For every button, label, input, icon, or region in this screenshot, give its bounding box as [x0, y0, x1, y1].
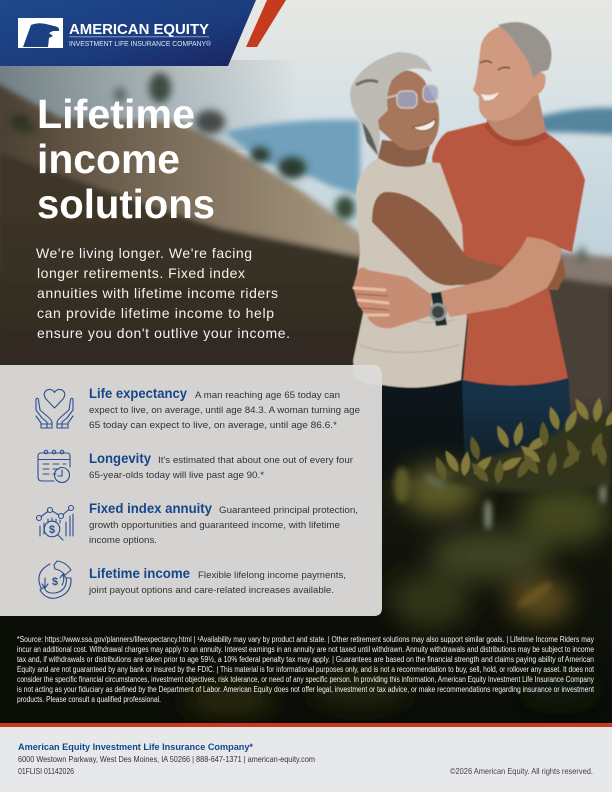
text block: life expectancy: 65 today can expect to live, on average, until age 86.6.*	[89, 420, 337, 431]
panel: key facts	[0, 365, 382, 616]
woman's arm	[372, 192, 507, 286]
woman's face	[374, 70, 439, 151]
intro text	[36, 245, 290, 341]
title: Lifetime	[37, 91, 195, 137]
intro text: longer retirements. Fixed index	[37, 265, 245, 281]
text block: longevity: Longevity	[89, 450, 151, 466]
woman's dark trousers	[352, 375, 470, 480]
text block: longevity: It's estimated that about one out of every four	[158, 455, 354, 466]
text block: lifetime income: Flexible lifelong income payments,	[198, 570, 346, 581]
photo: couple embracing	[350, 22, 585, 480]
title: solutions	[37, 181, 215, 227]
intro text: annuities with lifetime income riders	[37, 285, 278, 301]
text block: life expectancy: expect to live, on average, until age 84.3. A woman turning age	[89, 405, 360, 416]
icon: circular income arrows	[39, 561, 71, 598]
title	[37, 91, 215, 227]
woman's shirt	[353, 158, 467, 388]
footer: American Equity Investment Life Insurance Company*	[18, 742, 253, 753]
icon: heart in hands	[36, 389, 73, 428]
accent stripe	[246, 0, 286, 47]
woman's hand	[543, 258, 565, 290]
footer: ©2026 American Equity. All rights reserved.	[450, 766, 593, 776]
wristwatch	[429, 292, 447, 326]
clasped hands	[353, 268, 432, 328]
eagle mark	[18, 18, 63, 48]
text block: life expectancy: A man reaching age 65 today can	[195, 390, 340, 401]
icon: growth chart and magnifier	[36, 506, 74, 540]
text block: fixed index annuity: Guaranteed principal protection,	[219, 505, 358, 516]
woman's glasses	[386, 95, 398, 98]
text block: fixed index annuity: Fixed index annuity	[89, 500, 212, 516]
text block: longevity: 65-year-olds today will live past age 90.*	[89, 470, 264, 481]
footnote disclosures: products. Please consult a qualified professional.	[17, 695, 161, 704]
text block: fixed index annuity	[89, 500, 358, 546]
man's forearm	[438, 237, 562, 317]
blurred foliage foreground	[0, 395, 612, 730]
footer	[0, 723, 612, 792]
text block: lifetime income: Lifetime income	[89, 565, 190, 581]
intro text: can provide lifetime income to help	[37, 305, 274, 321]
logo	[18, 18, 212, 48]
footer: 6000 Westown Parkway, West Des Moines, IA 50266 | 888-647-1371 | american-equity.com	[18, 754, 315, 764]
intro text: We're living longer. We're facing	[36, 245, 252, 261]
footnote disclosures	[17, 635, 595, 704]
header banner	[0, 0, 286, 66]
man's neck	[486, 80, 547, 155]
text block: longevity	[89, 450, 354, 481]
man's red tee	[432, 122, 585, 386]
text block: fixed index annuity: growth opportunities and guaranteed income, with lifetime	[89, 520, 340, 531]
text block: fixed index annuity: income options.	[89, 535, 157, 546]
footer: 01FLISI 01142026	[18, 766, 74, 776]
icon: growth chart and magnifier: $	[49, 524, 55, 536]
title: income	[37, 136, 180, 182]
text block: lifetime income	[88, 565, 346, 596]
text block: lifetime income: joint payout options and care-related increases available.	[88, 585, 334, 596]
man's head	[473, 25, 545, 121]
intro text: ensure you don't outlive your income.	[37, 325, 290, 341]
icon: circular income arrows: $	[52, 576, 58, 588]
woman's hair	[350, 52, 432, 157]
text block: life expectancy	[89, 385, 360, 431]
logo: INVESTMENT LIFE INSURANCE COMPANY®	[69, 40, 212, 48]
man's navy trousers	[462, 372, 572, 480]
icon: calendar with clock	[38, 450, 70, 482]
sharp leaves near trousers	[432, 396, 612, 492]
logo: AMERICAN EQUITY	[69, 21, 209, 38]
woman's neck	[378, 140, 430, 167]
text block: life expectancy: Life expectancy	[89, 385, 187, 401]
